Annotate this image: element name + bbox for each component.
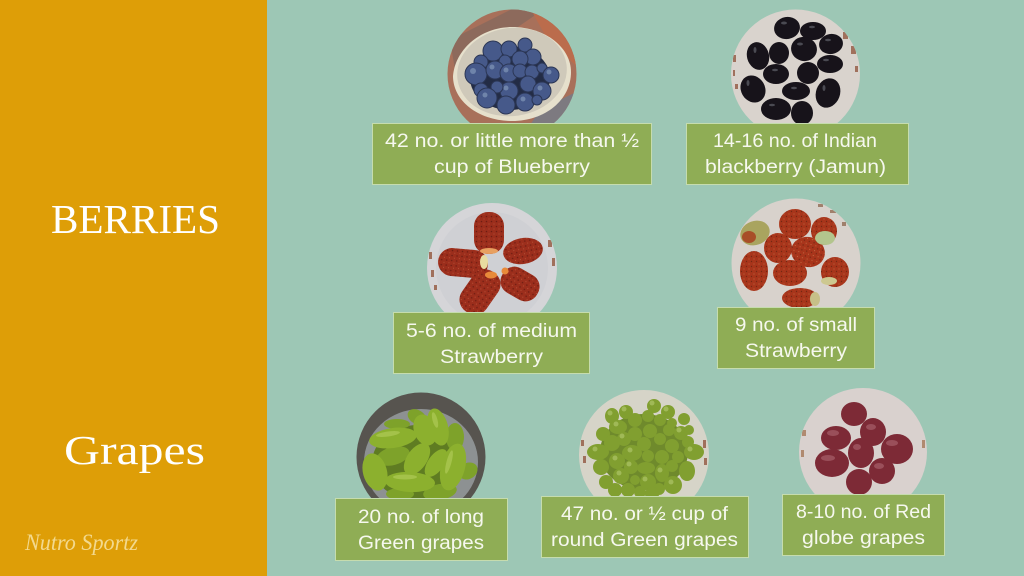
card: round green grapes — [542, 388, 748, 558]
card: blueberry — [372, 5, 652, 184]
card: jamun — [686, 5, 908, 184]
label: blueberry — [372, 124, 652, 184]
heading: berries: BERRIES — [51, 196, 220, 242]
photo: glass of long green grapes — [356, 392, 486, 498]
label: long green grapes: 20 no. of long — [358, 507, 484, 528]
label: blueberry: cup of Blueberry — [434, 157, 591, 178]
panel: left category sidebar — [0, 0, 267, 576]
photo: plate of red globe grapes — [798, 385, 930, 497]
photo: plate of medium strawberries — [427, 203, 557, 312]
label: jamun: blackberry (Jamun) — [705, 157, 886, 178]
label: long green grapes — [336, 498, 508, 560]
label: red globe grapes — [782, 494, 944, 556]
label: jamun: 14-16 no. of Indian — [713, 131, 877, 152]
card: long green grapes — [336, 390, 508, 560]
photo: bowl of blueberries — [445, 5, 580, 125]
label: medium strawberry: 5-6 no. of medium — [406, 321, 577, 342]
label: red globe grapes: globe grapes — [802, 528, 925, 549]
card: red globe grapes — [782, 385, 944, 556]
label: small strawberry: Strawberry — [745, 341, 848, 362]
logo: Nutro Sportz signature: Nutro Sportz — [24, 530, 138, 555]
label: jamun — [686, 124, 908, 184]
label: round green grapes: 47 no. or ½ cup of — [561, 504, 729, 525]
photo: plate of small strawberries — [732, 198, 860, 307]
label: small strawberry — [718, 308, 874, 368]
card: medium strawberry — [394, 200, 590, 374]
card: small strawberry — [718, 195, 874, 368]
label: medium strawberry — [394, 312, 590, 374]
label: medium strawberry: Strawberry — [440, 347, 544, 368]
photo: plate of round green grapes — [577, 388, 711, 501]
heading: grapes: Grapes — [64, 427, 205, 473]
label: round green grapes: round Green grapes — [551, 530, 738, 551]
label: red globe grapes: 8-10 no. of Red — [796, 502, 931, 523]
label: round green grapes — [542, 496, 748, 558]
photo: plate of Indian blackberries — [730, 5, 865, 125]
label: blueberry: 42 no. or little more than ½ — [385, 131, 639, 152]
label: small strawberry: 9 no. of small — [735, 315, 857, 336]
label: long green grapes: Green grapes — [358, 533, 484, 554]
